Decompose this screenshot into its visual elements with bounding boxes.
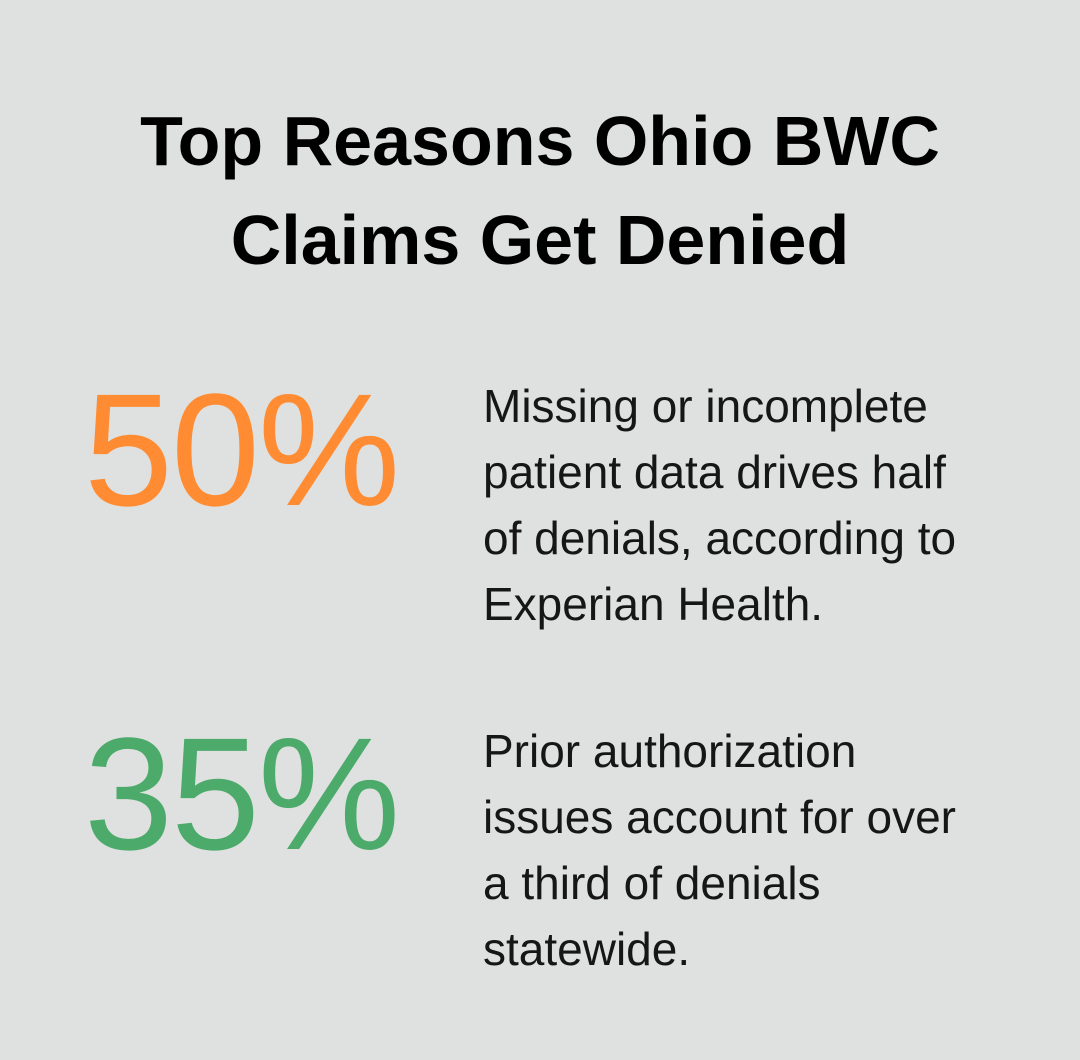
title: Top Reasons Ohio BWC [140, 102, 940, 180]
text: 50% description: of denials, according to [483, 512, 956, 564]
text: 50% description: Experian Health. [483, 578, 823, 630]
text: 35% description [483, 725, 956, 975]
stat: 35%: 35% [84, 704, 398, 883]
title: Claims Get Denied [231, 201, 849, 279]
stat: 50%: 50% [84, 360, 398, 539]
text: 50% description [483, 380, 956, 630]
text: 35% description: statewide. [483, 923, 690, 975]
title [140, 102, 940, 279]
text: 35% description: issues account for over [483, 791, 956, 843]
text: 50% description: patient data drives half [483, 446, 946, 498]
text: 35% description: Prior authorization [483, 725, 856, 777]
text: 35% description: a third of denials [483, 857, 821, 909]
text: 50% description: Missing or incomplete [483, 380, 928, 432]
